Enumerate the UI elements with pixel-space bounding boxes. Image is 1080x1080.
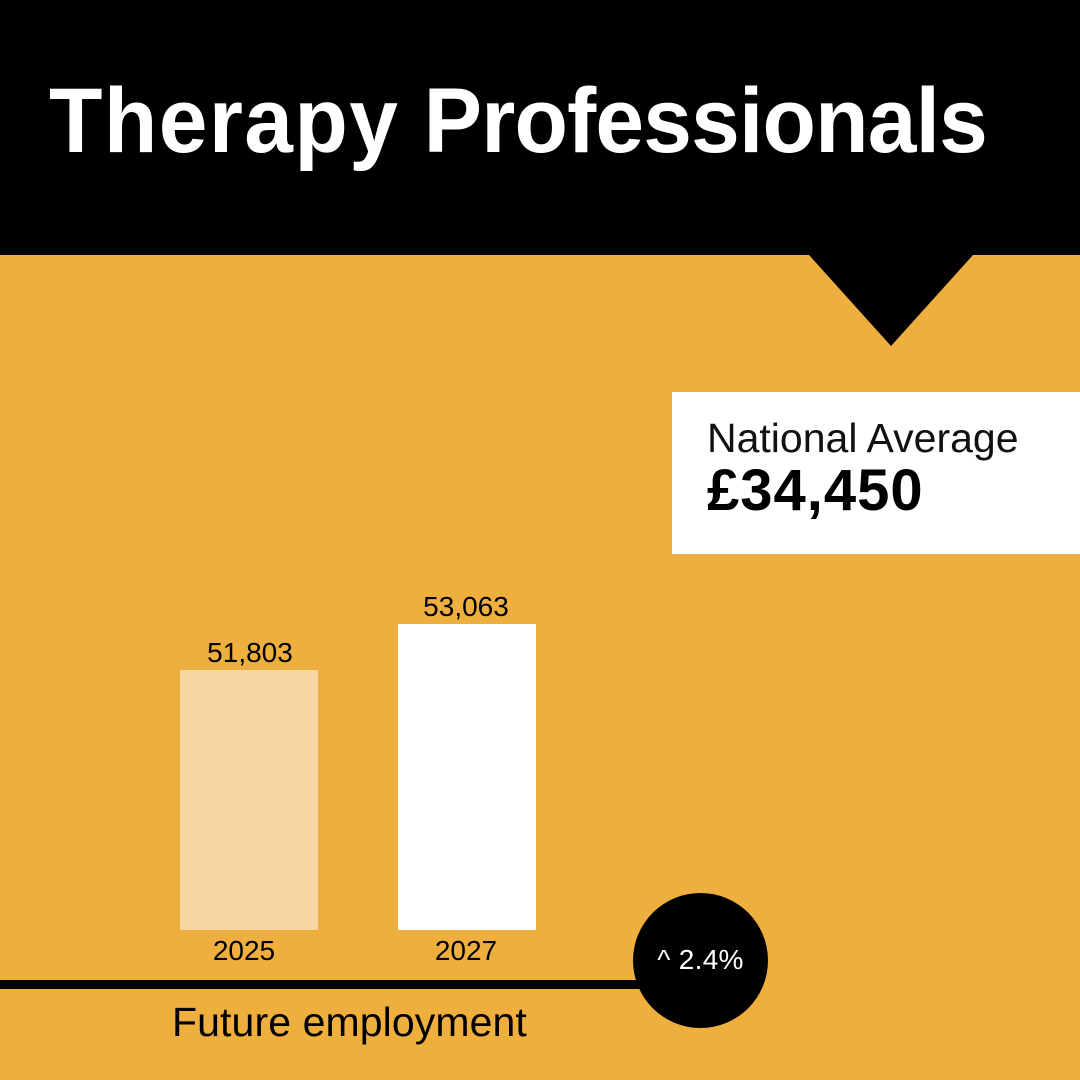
year 2027: 2027 bbox=[435, 935, 497, 966]
growth value: ^ 2.4% bbox=[657, 944, 744, 975]
value 2027: 53,063 bbox=[423, 591, 509, 622]
bar 2027 bbox=[398, 624, 536, 930]
growth badge bbox=[633, 893, 768, 1028]
axis line bbox=[0, 980, 650, 989]
panel: national average bbox=[672, 392, 1080, 554]
year 2025: 2025 bbox=[213, 935, 275, 966]
value 2025: 51,803 bbox=[207, 637, 293, 668]
label: national average: National Average bbox=[707, 415, 1019, 461]
chart caption: Future employment bbox=[172, 999, 527, 1045]
bar chart: future employment bbox=[180, 591, 536, 966]
value: national average salary: £34,450 bbox=[707, 458, 924, 523]
bar 2025 bbox=[180, 670, 318, 930]
title: Therapy Professionals bbox=[49, 70, 987, 172]
header band with pointer bbox=[0, 0, 1080, 346]
